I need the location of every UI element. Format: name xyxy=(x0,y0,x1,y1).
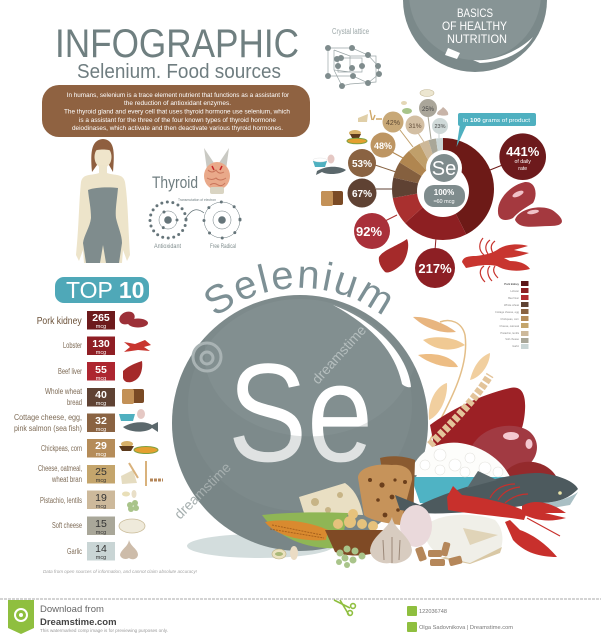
row: chickpeas, corn: 29 xyxy=(95,440,107,452)
footer: dreamstime strip: This watermarked comp image is for previewing purposes only. xyxy=(40,628,168,633)
row: pistachio, lentils xyxy=(40,490,139,512)
bubble: 53% xyxy=(348,149,376,177)
row: lobster: mcg xyxy=(96,350,106,356)
row: lobster: 130 xyxy=(92,338,110,350)
chart: donut of selenium percent daily rate xyxy=(375,116,505,250)
icon: pistachios xyxy=(272,546,298,560)
bubble: 25% xyxy=(419,99,437,117)
bubble: 48% xyxy=(370,132,396,158)
diagram: antioxidant atom xyxy=(150,202,186,238)
icon: soft cheese xyxy=(420,90,434,96)
row: pistachio, lentils: mcg xyxy=(96,504,106,510)
legend xyxy=(495,281,528,349)
food pile xyxy=(262,317,578,568)
panel: basics of healthy nutrition: OF HEALTHY xyxy=(442,19,507,33)
legend: Pistachio, lentils xyxy=(500,331,520,335)
icon: pistachio and lentils xyxy=(401,101,412,114)
row: whole wheat bread xyxy=(45,387,144,407)
panel: basics of healthy nutrition: BASICS xyxy=(457,6,493,20)
row: pork kidney xyxy=(37,309,148,330)
row: pistachio, lentils: Pistachio, lentils xyxy=(40,496,82,505)
label: antioxidant: Antioxidant xyxy=(154,244,181,250)
row: cheese, oatmeal, wheat bran xyxy=(38,461,163,486)
row: cheese, oatmeal, wheat bran: Cheese, oatmeal, xyxy=(38,464,82,473)
footer: dreamstime strip: 122036748 xyxy=(419,609,447,615)
bubble: 441%: of daily xyxy=(514,159,531,165)
icon: corn cob xyxy=(262,512,348,548)
subtitle: Selenium. Food sources xyxy=(77,61,281,83)
bubble: 92% xyxy=(354,213,390,249)
row: garlic: 14 xyxy=(95,543,107,555)
label: free radical: Free Radical xyxy=(210,244,236,250)
footnote: Data from open sources of information, and cannot claim absolute accuracy! xyxy=(43,569,198,574)
panel: intro text xyxy=(42,85,310,137)
panel: intro text: deiodinases, which activate and then deactivate various thyroid hormones. xyxy=(72,125,283,132)
row: pork kidney: Pork kidney xyxy=(37,315,82,327)
icon: chickpeas and corn xyxy=(347,130,367,144)
icon: beef liver large xyxy=(430,387,525,460)
row: beef liver: mcg xyxy=(96,376,106,382)
legend: Chickpeas, corn xyxy=(500,317,520,321)
panel: intro text: the reduction of antioxidant enzymes. xyxy=(124,100,231,107)
shadow under ball xyxy=(187,534,333,558)
footer: dreamstime strip xyxy=(0,599,601,634)
legend: Garlic xyxy=(512,344,520,348)
row: cottage cheese, egg, pink salmon: pink salmon (sea fish) xyxy=(14,424,82,433)
icon: cheese wedge xyxy=(299,483,363,515)
row: chickpeas, corn xyxy=(41,439,158,458)
bubble: 217%: 217% xyxy=(418,261,452,276)
icon: garlic xyxy=(437,107,448,116)
row: lobster: Lobster xyxy=(63,341,82,350)
watermark: swirl xyxy=(193,343,221,371)
row: whole wheat bread: mcg xyxy=(96,401,106,407)
bubble: 42% xyxy=(382,112,404,132)
icon: thyroid gland xyxy=(204,148,230,194)
heading: top 10: TOP 10 xyxy=(66,277,144,303)
panel: basics of healthy nutrition xyxy=(403,0,547,72)
icon: garlic large xyxy=(370,517,412,563)
icon: scissors xyxy=(334,600,355,615)
panel: intro text: The thyroid gland and every cell that uses thyroid hormone use selenium, which xyxy=(64,108,290,116)
legend: Soft cheese xyxy=(505,337,520,341)
icon: beef liver xyxy=(379,239,408,273)
bubble: 441% xyxy=(499,133,546,180)
icon: egg xyxy=(400,505,432,547)
legend: Lobster xyxy=(510,289,519,293)
row: cheese, oatmeal, wheat bran: 25 xyxy=(95,466,107,478)
legend: Cottage cheese, egg xyxy=(495,310,520,314)
bubble: 42%: 42% xyxy=(386,120,400,127)
row: cheese, oatmeal, wheat bran: wheat bran xyxy=(51,475,82,484)
icon: peas xyxy=(336,546,366,568)
icon: cheese, oat, bran xyxy=(358,110,382,122)
footer: dreamstime strip: Download from xyxy=(40,604,104,615)
bubble: 23% xyxy=(432,118,448,134)
panel: basics of healthy nutrition: NUTRITION xyxy=(447,32,507,46)
row: garlic: mcg xyxy=(96,555,106,561)
row: pork kidney: 265 xyxy=(92,312,110,324)
connector lines xyxy=(375,116,505,250)
row: pork kidney: mcg xyxy=(96,324,106,330)
bubble: 441%: 441% xyxy=(506,144,540,159)
row: beef liver xyxy=(58,361,142,382)
label: crystal lattice: Crystal lattice xyxy=(332,27,369,36)
row: garlic xyxy=(67,540,138,561)
watermark: dreamstime lower: dreamstime xyxy=(171,459,234,522)
panel: intro text: In humans, selenium is a trace element nutrient that functions as a assistant for xyxy=(67,92,290,99)
callout: in 100 grams of product xyxy=(456,113,536,147)
icon: bread loaf xyxy=(358,456,415,525)
chart: donut of selenium percent daily rate: Se xyxy=(432,158,456,180)
chart: donut of selenium percent daily rate: ≈60 mcg xyxy=(433,199,455,205)
row: soft cheese xyxy=(52,516,145,536)
row: cottage cheese, egg, pink salmon: Cottage cheese, egg, xyxy=(14,413,82,422)
element ball: Se xyxy=(172,295,428,551)
icon: kidney large xyxy=(470,426,560,495)
row: chickpeas, corn: mcg xyxy=(96,452,106,458)
footer: dreamstime strip: Dreamstime.com xyxy=(40,617,117,628)
diagram: free radical atom xyxy=(186,202,240,238)
bubble: 31% xyxy=(406,116,424,134)
icon: chickpea bowl xyxy=(325,509,385,556)
title: INFOGRAPHIC xyxy=(55,22,299,66)
icon: lobster xyxy=(462,238,530,282)
row: beef liver: 55 xyxy=(95,364,107,376)
bubble: 67% xyxy=(348,178,376,208)
icon: pork kidneys xyxy=(498,182,562,227)
label: thyroid: Thyroid xyxy=(152,173,198,192)
row: cottage cheese, egg, pink salmon: mcg xyxy=(96,427,106,433)
icon: lobster large xyxy=(447,484,566,557)
bubble: 53%: 53% xyxy=(352,159,372,170)
footer: dreamstime strip: Olga Sadovnikova | Dreamstime.com xyxy=(419,625,513,631)
legend: Whole wheat xyxy=(504,303,519,307)
bubble: 217% xyxy=(415,248,455,288)
callout: in 100 grams of product: In 100 grams of product xyxy=(463,118,530,124)
heading: curved selenium: Selenium xyxy=(205,262,390,314)
legend: Pork kidney xyxy=(504,282,520,286)
element ball: Se: Se xyxy=(228,334,373,491)
icon: dreamstime badge xyxy=(8,600,34,634)
icon: bran pellets xyxy=(415,541,463,566)
row: chickpeas, corn: Chickpeas, corn xyxy=(41,444,82,453)
row: cheese, oatmeal, wheat bran: mcg xyxy=(96,478,106,484)
watermark: dreamstime: dreamstime xyxy=(308,322,369,387)
row: cottage cheese, egg, pink salmon: 32 xyxy=(95,415,107,427)
legend: Cheese, oatmeal xyxy=(499,324,519,328)
icon: salmon fish xyxy=(395,471,578,513)
row: soft cheese: mcg xyxy=(96,530,106,536)
bubble: 23%: 23% xyxy=(434,124,446,130)
icon: woman figure xyxy=(76,139,130,263)
icon: soft cheese large xyxy=(425,515,502,564)
icon: wheat ear xyxy=(430,375,490,445)
chart: donut of selenium percent daily rate: 100% xyxy=(434,188,454,197)
icon: id xyxy=(407,606,417,616)
bubble: 441%: rate xyxy=(518,166,527,172)
icon: bread xyxy=(321,191,343,206)
bubble: 25%: 25% xyxy=(422,107,435,113)
TOP 10 list xyxy=(14,277,163,561)
legend: Beef liver xyxy=(508,296,519,300)
panel: intro text: is a assistant for the three of the four known types of thyroid hormone xyxy=(79,117,276,124)
row: soft cheese: Soft cheese xyxy=(52,521,82,530)
icon: oat stalk xyxy=(413,317,490,440)
row: cottage cheese, egg, pink salmon xyxy=(14,409,158,433)
row: beef liver: Beef liver xyxy=(58,367,82,376)
bubble: 48%: 48% xyxy=(374,141,392,151)
row: soft cheese: 15 xyxy=(95,518,107,530)
bubble: 67%: 67% xyxy=(352,189,372,200)
row: whole wheat bread: Whole wheat xyxy=(45,387,83,396)
icon: author xyxy=(407,622,417,632)
icon: salmon with cottage cheese and egg xyxy=(313,154,346,175)
bubble: 31%: 31% xyxy=(408,123,422,130)
label: transmutation of electron: Transmutation of electron xyxy=(178,198,216,202)
row: garlic: Garlic xyxy=(67,547,82,556)
row: whole wheat bread: bread xyxy=(67,398,82,407)
bubble: 92%: 92% xyxy=(356,224,382,239)
row: whole wheat bread: 40 xyxy=(95,389,107,401)
row: lobster xyxy=(63,336,151,356)
icon: cottage cheese bowl xyxy=(410,443,510,504)
row: pistachio, lentils: 19 xyxy=(95,492,107,504)
diagram: crystal lattice xyxy=(325,45,382,89)
